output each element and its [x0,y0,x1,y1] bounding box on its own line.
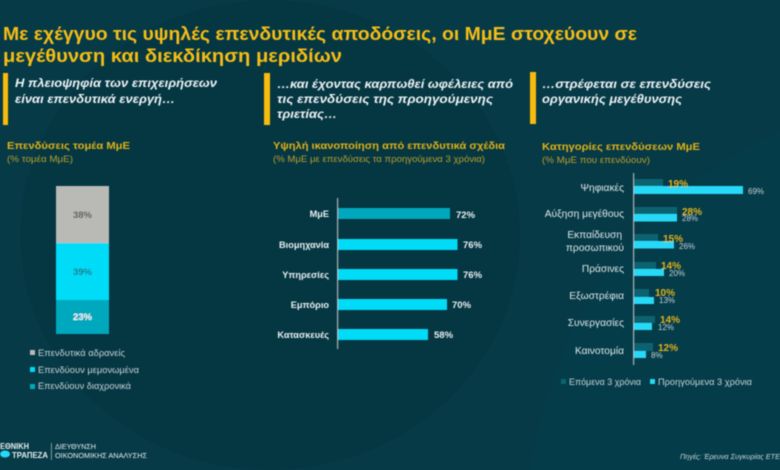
panel statement [15,76,217,106]
horizontal bar chart: 76% [463,240,483,251]
stacked bar chart: 23% [73,312,93,323]
grouped bar chart: 28% [682,207,702,218]
legend: Επενδύουν διαχρονικά [38,381,131,392]
grouped bar chart: 15% [663,234,683,245]
horizontal bar chart: 58% [434,330,454,341]
logo [0,442,147,460]
grouped bar chart: Εκπαίδευση [567,229,622,241]
logo wordmark [0,442,48,460]
grouped bar chart [545,173,764,365]
grouped bar chart: 10% [655,288,675,299]
source note: Πηγές: Έρευνα Συγκυρίας ΕΤΕ [680,452,780,461]
legend: Επόμενα 3 χρόνια [569,377,641,387]
grouped bar chart: 12% [658,323,674,332]
horizontal bar chart: Υπηρεσίες [282,270,329,280]
grouped bar chart: 69% [748,187,764,196]
grouped bar chart: Συνεργασίες [568,317,624,329]
chart heading: Κατηγορίες επενδύσεων ΜμΕ [542,141,700,153]
grouped bar chart: Πράσινες [582,263,624,275]
chart heading: Επενδύσεις τομέα ΜμΕ [7,140,130,152]
legend: Προηγούμενα 3 χρόνια [658,377,752,387]
department name [55,442,147,460]
grouped bar chart: 14% [661,261,681,272]
panel: satisfaction [264,73,513,349]
panel statement: οργανικής μεγέθυνσης [542,92,683,106]
legend: Επενδυτικά αδρανείς [38,348,125,359]
legend: Επενδύουν μεμονωμένα [38,365,139,376]
chart heading [542,141,700,165]
legend [30,348,139,392]
grouped bar chart: 8% [651,351,663,360]
grouped bar chart: Καινοτομία [575,345,624,357]
horizontal bar chart: Κατασκευές [277,330,329,340]
horizontal bar chart: 72% [456,210,476,221]
accent bar [264,73,270,125]
chart heading: Υψηλή ικανοποίηση από επενδυτικά σχέδια [273,140,506,152]
grouped bar chart: Αύξηση μεγέθους [545,208,624,220]
panel: investment activity [3,73,217,392]
panel statement: Η πλειοψηφία των επιχειρήσεων [15,76,217,90]
logo wordmark: ΤΡΑΠΕΖΑ [12,450,48,460]
grouped bar chart: προσωπικού [566,242,624,254]
accent bar [3,73,8,125]
legend [561,377,752,387]
logo wordmark: ΕΘΝΙΚΗ [0,442,29,451]
grouped bar chart: 26% [679,242,695,251]
title: μεγέθυνση και διεκδίκηση μεριδίων [3,46,342,66]
grouped bar chart: Ψηφιακές [581,182,624,194]
department name: ΟΙΚΟΝΟΜΙΚΗΣ ΑΝΑΛΥΣΗΣ [55,451,147,460]
horizontal bar chart: 70% [452,300,472,311]
stacked bar chart: 39% [73,267,93,278]
panel: investment categories [530,72,764,387]
panel statement [277,77,513,121]
horizontal bar chart: Βιομηχανία [279,240,329,250]
horizontal bar chart: 76% [463,270,483,281]
stacked bar chart [56,186,109,334]
horizontal bar chart: Εμπόριο [291,300,329,310]
chart heading: (% ΜμΕ που επενδύουν) [542,155,650,165]
panel statement: τις επενδύσεις της προηγούμενης [277,92,494,106]
panel statement [542,77,712,106]
panel statement: …και έχοντας καρπωθεί ωφέλειες από [277,77,513,91]
panel statement: είναι επενδυτικά ενεργή… [15,92,175,106]
grouped bar chart: 20% [669,269,685,278]
horizontal bar chart: ΜμΕ [310,209,329,219]
grouped bar chart: 19% [668,179,688,190]
panel statement: τριετίας… [277,107,337,121]
panel statement: …στρέφεται σε επενδύσεις [542,77,712,91]
grouped bar chart: 13% [659,296,675,305]
chart heading: (% τομέα ΜμΕ) [7,154,73,164]
department name: ΔΙΕΥΘΥΝΣΗ [55,442,96,451]
title [3,24,637,66]
grouped bar chart: 12% [658,343,678,354]
chart heading [7,140,130,164]
stacked bar chart: 38% [73,210,93,221]
grouped bar chart: 14% [660,315,680,326]
chart heading: (% ΜμΕ με επενδύσεις τα προηγούμενα 3 χρόνια) [273,154,485,164]
horizontal bar chart [277,198,483,349]
accent bar [530,72,536,124]
title: Με εχέγγυο τις υψηλές επενδυτικές αποδόσεις, οι ΜμΕ στοχεύουν σε [3,24,637,44]
chart heading [273,140,506,164]
grouped bar chart: Εξωστρέφια [569,290,624,302]
grouped bar chart: 28% [682,214,698,223]
